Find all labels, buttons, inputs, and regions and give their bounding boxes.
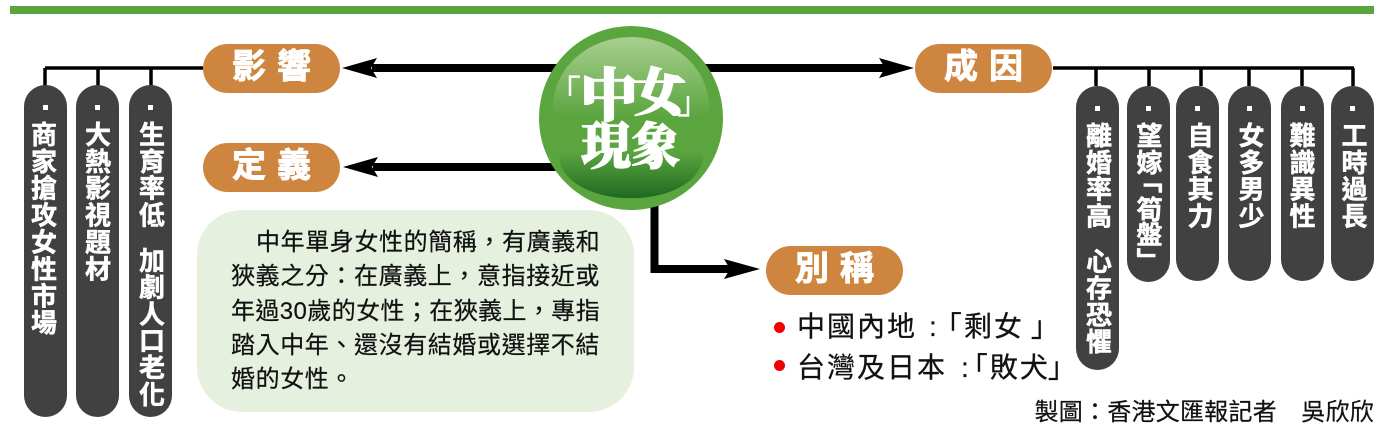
cause pill 4: 女多男少 (1235, 122, 1265, 230)
definition panel (197, 210, 634, 412)
definition text: 中年單身女性的簡稱，有廣義和 (256, 229, 600, 256)
circle title line 1: 」 (678, 87, 708, 120)
cause pill 3 (1176, 86, 1219, 281)
circle top highlight (553, 37, 709, 117)
impact pill 2 (76, 85, 119, 417)
circle title line 1: 中 (580, 64, 638, 129)
tag: other names: 別稱 (795, 250, 885, 288)
cause pill 4 (1228, 86, 1271, 281)
circle title line 1 (550, 64, 708, 129)
impact pill 1 (24, 85, 67, 417)
cause pill 2: 望嫁「 筍 盤 」 (1133, 122, 1163, 274)
impact pill 2: 大熱影視題材 (82, 121, 112, 282)
definition text: 年過30歲的女性；在狹義上，專指 (231, 298, 600, 325)
tag: causes: 成因 (944, 48, 1034, 86)
list item 1: 中國內地 :「剩女」 (797, 311, 1061, 342)
circle title line 2: 現象 (581, 119, 681, 175)
cause pill 5: 難識異性 (1286, 122, 1316, 230)
impact pill 1: 商家搶攻女性市場 (28, 121, 58, 336)
tag: causes (915, 44, 1052, 93)
red bullet 2 (774, 360, 785, 371)
circle title line 1: 「 (550, 76, 580, 109)
definition text: 踏入中年、還沒有結婚或選擇不結 (231, 332, 600, 359)
cause pill 3: 自食其力 (1184, 122, 1214, 230)
cause pill 6: 工時過長 (1338, 122, 1368, 230)
cause pill 1 (1076, 86, 1119, 370)
cause pill 6 (1331, 86, 1374, 281)
impact pill 3: 生育率低 加 劇人口老化 (136, 121, 166, 408)
definition text: 狹義之分：在廣義上，意指接近或 (231, 263, 600, 290)
tag: impact (203, 44, 340, 93)
credit: 製圖：香港文匯報記者 吳欣欣 (1034, 399, 1374, 426)
cause pill 2 (1127, 86, 1170, 282)
circle title line 1: 女 (633, 66, 685, 123)
tag: definition (203, 143, 340, 192)
circle bottom shade (559, 152, 703, 198)
top green bar (10, 6, 1374, 14)
impact pill 3 (129, 85, 172, 417)
center circle badge (539, 26, 723, 210)
tag: definition: 定義 (232, 147, 322, 185)
cause pill 5 (1281, 86, 1324, 281)
red bullet 1 (774, 322, 785, 333)
tag: impact: 影響 (232, 48, 322, 86)
definition text: 婚的女性。 (231, 366, 354, 393)
cause pill 1: 離婚率高 心 存恐懼 (1082, 122, 1112, 355)
definition text (231, 229, 600, 393)
list item 2: 台灣及日本 :「敗犬」 (797, 352, 1078, 383)
tag: other names (766, 246, 903, 295)
